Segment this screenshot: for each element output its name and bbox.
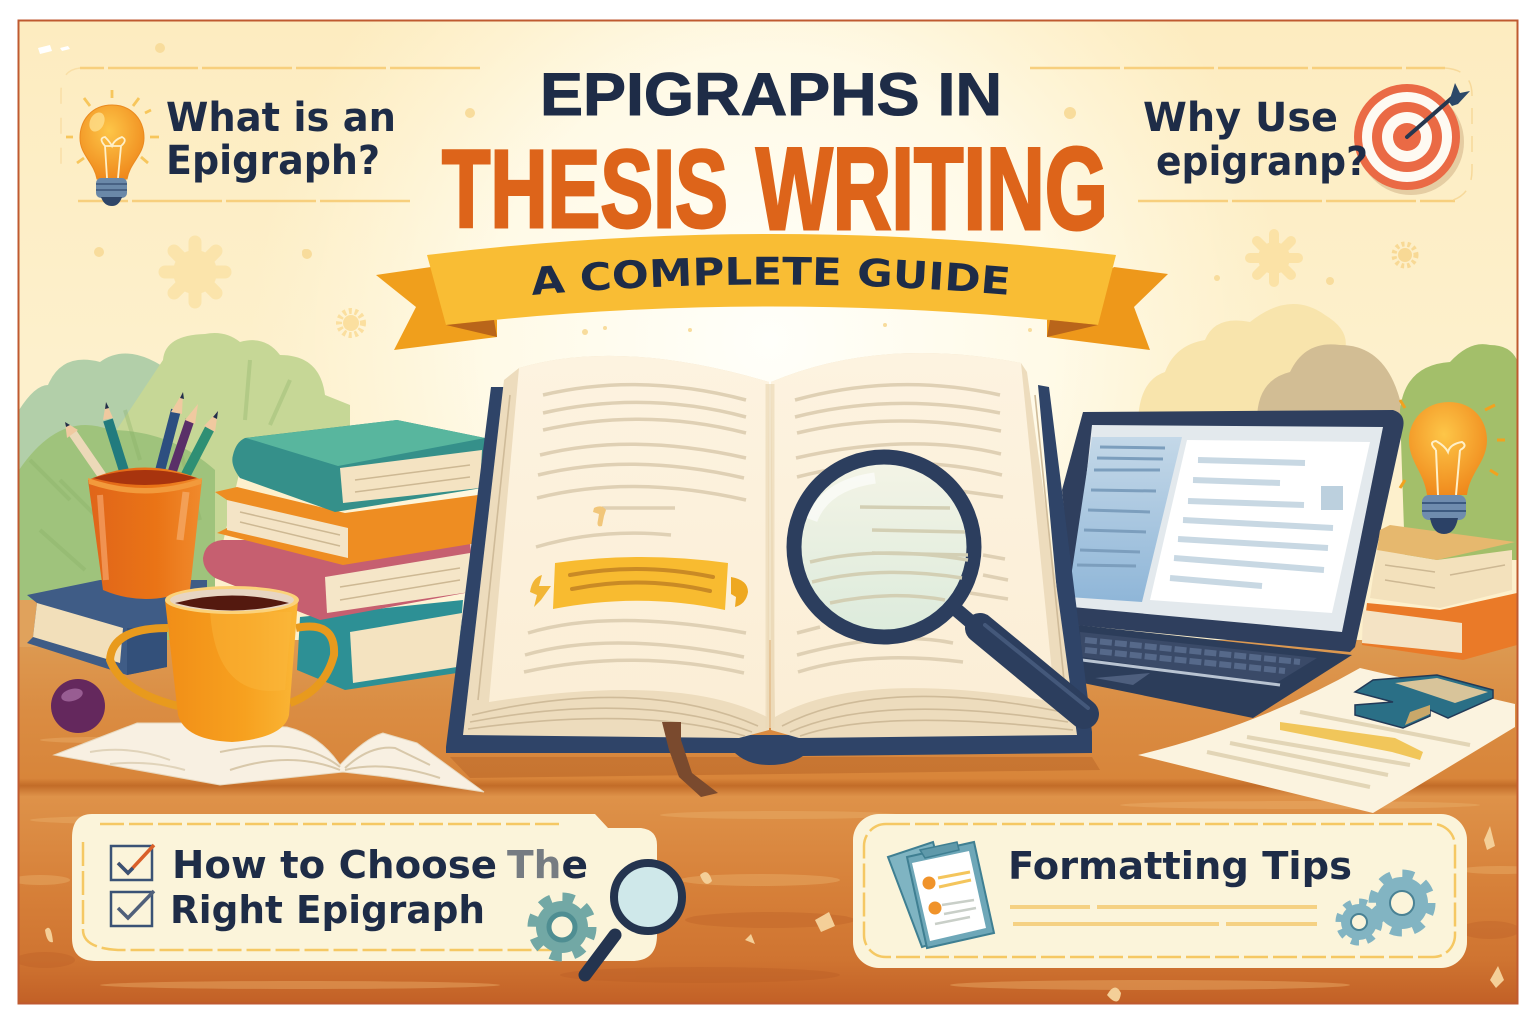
- left page: [489, 356, 769, 717]
- heading: what is an epigraph: What is an: [166, 95, 396, 141]
- top left panel: what is an epigraph: [61, 68, 480, 206]
- paper highlight: [1280, 722, 1423, 760]
- heading: why use: Why Use: [1143, 95, 1338, 141]
- title: [442, 61, 1108, 254]
- heading: how to choose the right epigraph: [170, 843, 588, 932]
- icon: gears: [1339, 874, 1431, 942]
- magnifying glass: [794, 457, 1088, 714]
- heading: formatting tips: Formatting Tips: [1008, 844, 1352, 888]
- right page stack: [771, 353, 1077, 738]
- title: EPIGRAPHS IN: [540, 61, 1002, 128]
- icon: checkbox one: [111, 845, 154, 880]
- icon: right light bulb: [1400, 400, 1505, 534]
- icon: clipboard: [888, 842, 994, 948]
- laptop: [1062, 410, 1404, 718]
- epigraph highlight: [530, 557, 748, 610]
- title: THESIS: [442, 128, 728, 251]
- wooden table: [10, 600, 1536, 1004]
- page edges: [468, 395, 1073, 736]
- left books stack: [27, 420, 485, 690]
- ribbon bookmark: [662, 722, 718, 797]
- icon: teal gear: [532, 897, 592, 957]
- paper lines: [1207, 712, 1470, 787]
- icon: small magnifier: [585, 863, 682, 975]
- scattered paper: [1138, 668, 1515, 813]
- laptop document lines: [1170, 460, 1333, 586]
- small open book: [54, 723, 484, 792]
- icon: light bulb: [66, 90, 159, 206]
- bottom right panel: formatting tips: [853, 814, 1467, 968]
- heading: what is an epigraph: Epigraph?: [166, 138, 380, 184]
- heading: what is an epigraph: [166, 95, 396, 184]
- orange book: [215, 487, 478, 565]
- title: WRITING: [756, 123, 1108, 254]
- heading: why use: epigranp?: [1156, 139, 1368, 185]
- pink book: [203, 540, 471, 620]
- pencil cup: [65, 392, 218, 599]
- cream book: [1370, 525, 1515, 608]
- heading: how to choose the right epigraph: Right Epigraph: [170, 888, 485, 932]
- text underline bars: [1010, 907, 1317, 924]
- lens lines: [810, 507, 968, 603]
- book cover: [446, 385, 1092, 765]
- top teal book: [232, 420, 485, 512]
- ribbon banner: [376, 234, 1168, 350]
- coffee mug: [110, 586, 334, 742]
- top right panel: why use epigraph: [1030, 68, 1472, 201]
- subtitle: A COMPLETE GUIDE: [532, 256, 1008, 295]
- decorative sunbursts: [38, 43, 1416, 335]
- page text lines: [524, 385, 1008, 673]
- icon: target with arrow: [1354, 83, 1470, 195]
- table shadows: [450, 757, 1100, 778]
- puzzle block: [1355, 675, 1493, 728]
- icon: checkbox two: [111, 891, 154, 926]
- plum: [51, 679, 105, 733]
- lower teal book: [297, 600, 463, 690]
- orange book: [1362, 593, 1517, 660]
- main open book: [446, 353, 1092, 797]
- right books and bulb: [1362, 400, 1517, 660]
- right page: [771, 353, 1055, 717]
- bottom left panel: how to choose: [72, 814, 682, 975]
- left page stack: [463, 356, 769, 738]
- background foliage: [19, 304, 1517, 640]
- heading: how to choose the right epigraph: The: [507, 843, 588, 887]
- short quote mark: [593, 506, 606, 526]
- heading: how to choose the right epigraph: How to Choose: [172, 843, 497, 887]
- blue book: [27, 580, 207, 675]
- heading: why use: [1143, 95, 1368, 185]
